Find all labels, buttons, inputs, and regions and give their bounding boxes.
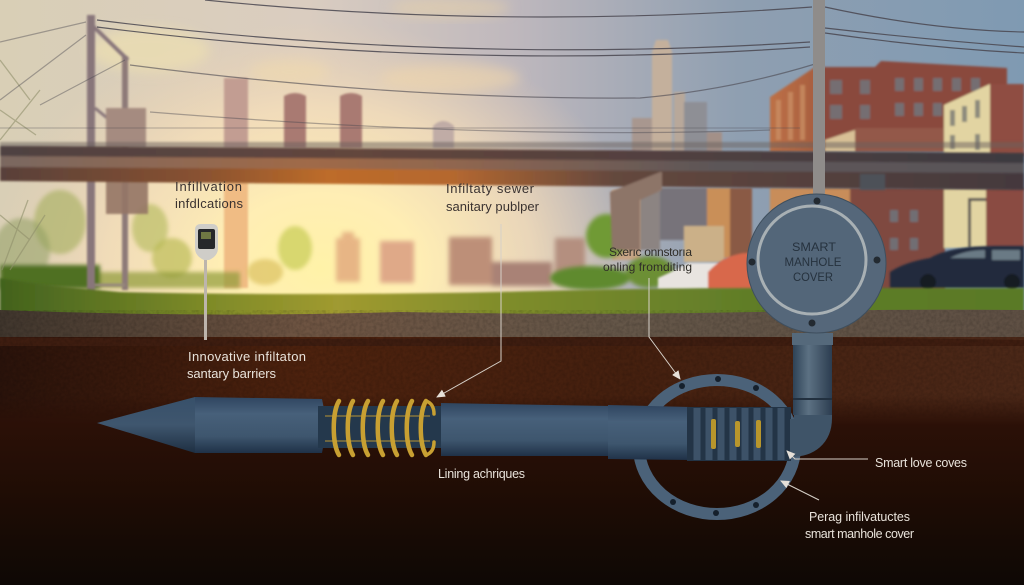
leader: sanitary arrow <box>437 224 501 397</box>
cover lettering: COVER <box>793 270 833 284</box>
cover lettering: SMART <box>792 240 837 254</box>
wrapped section <box>687 407 791 461</box>
illustration: ground layers <box>0 310 1024 585</box>
illustration: parked cars <box>658 246 1024 290</box>
label: sensor connections <box>603 245 692 274</box>
leader: ring arrow <box>781 481 819 500</box>
leader: lining arrow <box>649 278 680 379</box>
illustration: city skyline <box>224 40 1024 293</box>
pipe segment right <box>608 405 690 460</box>
illustration: utility pylon <box>87 15 148 297</box>
label: infiltration indications: Infillvation <box>175 179 242 194</box>
label: smart valve: Smart love coves <box>875 456 967 470</box>
icon: smart manhole cover <box>747 194 886 333</box>
illustration: flange ring <box>639 376 795 516</box>
label: innovative barriers: santary barriers <box>187 366 276 381</box>
label: innovative barriers: Innovative infiltaton <box>188 349 306 364</box>
illustration: sewer pipe <box>97 333 833 461</box>
illustration: elevated bridge <box>0 142 1024 250</box>
label: smart manhole note: smart manhole cover <box>805 527 914 541</box>
illustration: trees <box>0 190 674 290</box>
pipe nose cone <box>97 397 195 453</box>
label: smart manhole note: Perag infilvatuctes <box>809 510 910 524</box>
illustration: grass strip <box>0 278 1024 318</box>
pipe segment middle <box>441 403 610 456</box>
label: innovative barriers <box>187 349 306 381</box>
label: sewer: sanitary publper <box>446 199 540 214</box>
label: smart manhole note <box>805 510 914 541</box>
pipe segment left <box>195 397 325 453</box>
cover lettering <box>784 240 842 284</box>
panel: sky background <box>0 0 1024 320</box>
illustration: power lines <box>0 0 1024 133</box>
label: lining techniques: Lining achriques <box>438 467 525 481</box>
icon: sensor device <box>195 224 218 340</box>
illustration: utility pole <box>813 0 825 197</box>
label: sewer <box>446 181 540 214</box>
label: sensor connections: onling fromditing <box>603 260 692 274</box>
illustration: bare branches <box>0 60 45 270</box>
label: sewer: Infiltaty sewer <box>446 181 535 196</box>
label: sensor connections: Sxerıc onnstorıa <box>609 245 692 259</box>
inner sleeve <box>318 406 443 448</box>
label: infiltration indications: infdlcations <box>175 196 244 211</box>
leader: valve arrow <box>787 451 868 459</box>
label: infiltration indications <box>175 179 244 211</box>
cover lettering: MANHOLE <box>784 255 842 269</box>
yellow rings <box>334 401 434 455</box>
elbow and riser <box>790 335 813 438</box>
